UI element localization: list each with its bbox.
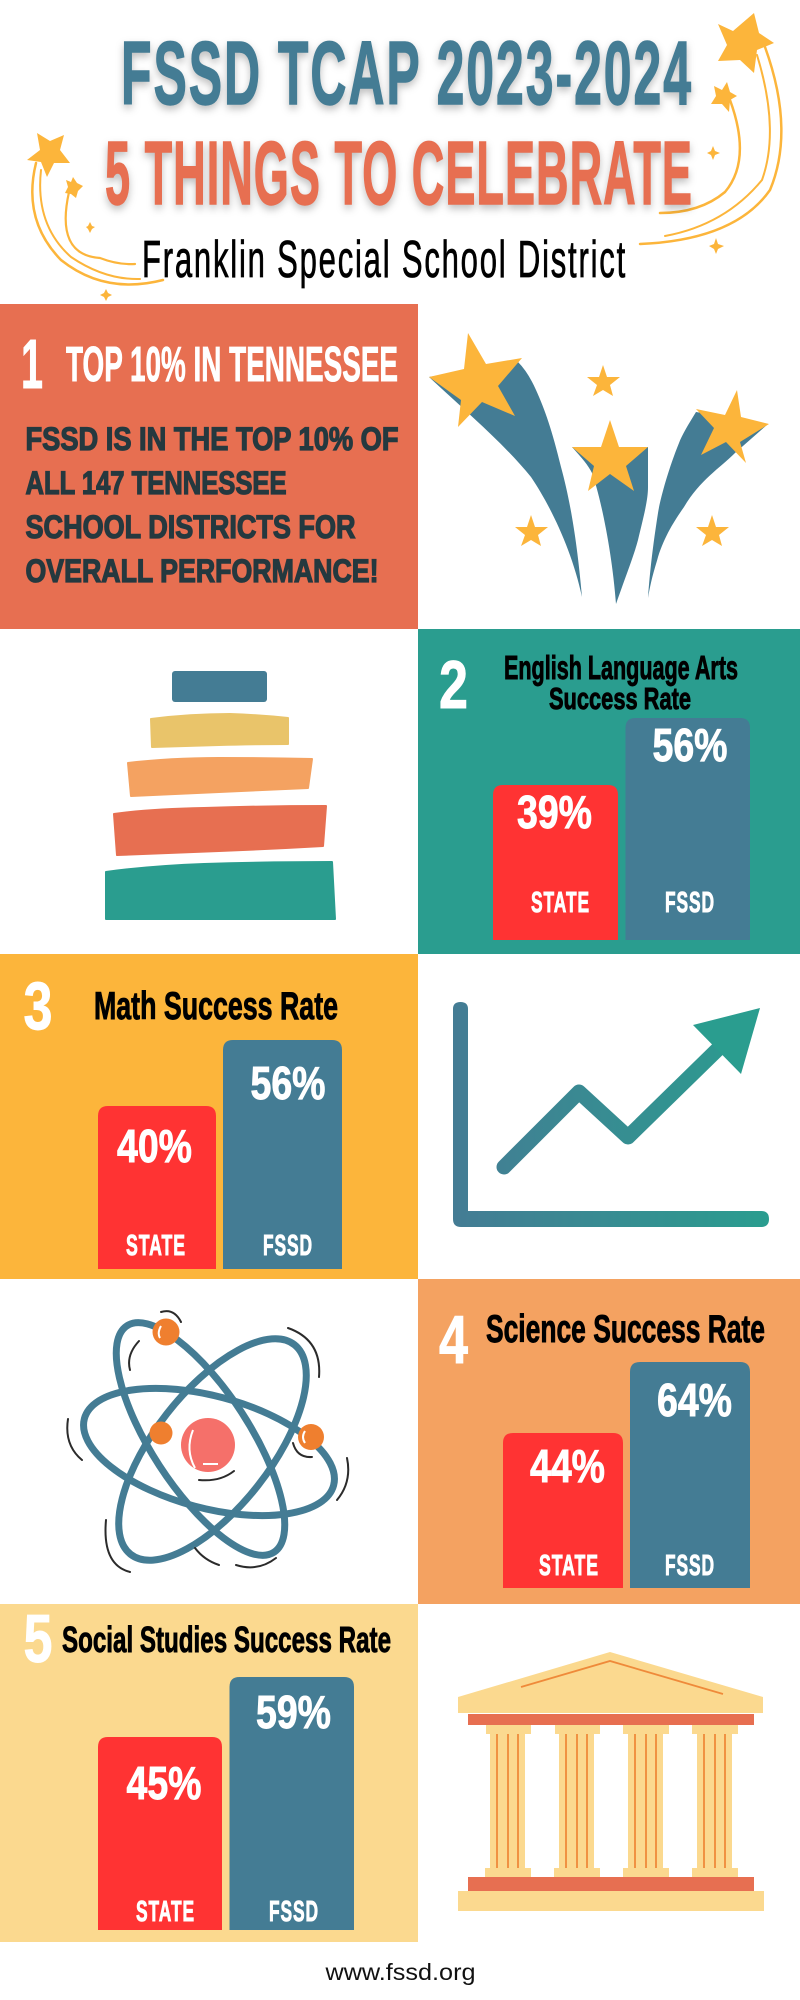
bar: FSSD: [626, 718, 750, 940]
icon: shooting stars right: [640, 13, 781, 254]
heading: Social Studies Success Rate: [62, 1619, 391, 1660]
number 1: 1: [21, 325, 43, 403]
bar: FSSD: FSSD: [665, 887, 715, 919]
heading: Success Rate: [549, 681, 691, 716]
bar: FSSD: [230, 1677, 354, 1930]
bar: state: [98, 1106, 216, 1269]
bar: state: [493, 785, 618, 940]
icon: fireworks: [429, 333, 769, 604]
bar: state: STATE: [126, 1230, 186, 1262]
heading: Math Success Rate: [94, 985, 338, 1028]
body text: FSSD IS IN THE TOP 10% OF: [26, 421, 398, 457]
panel 4: Science: [418, 1279, 800, 1604]
heading: [504, 649, 738, 716]
icon: atom: [67, 1299, 348, 1590]
body text: [26, 421, 398, 589]
bar: state: 39%: [517, 786, 592, 838]
icon: stacked pyramid: [106, 671, 335, 919]
footer url: www.fssd.org: [324, 1959, 476, 1985]
bar: state: [503, 1433, 623, 1588]
number 4: 4: [439, 1302, 468, 1378]
number 3: 3: [24, 968, 52, 1044]
bar: FSSD: FSSD: [665, 1550, 715, 1582]
bar: state: [98, 1737, 222, 1930]
panel 2: English Language Arts: [418, 629, 800, 954]
panel 1: top 10%: [0, 304, 418, 629]
body text: ALL 147 TENNESSEE: [26, 465, 286, 501]
icon: shooting stars left: [27, 133, 163, 301]
bar: state: STATE: [531, 887, 590, 919]
heading: TOP 10% IN TENNESSEE: [66, 338, 398, 392]
body text: SCHOOL DISTRICTS FOR: [26, 509, 356, 545]
number 5: 5: [24, 1601, 52, 1677]
bar: FSSD: [223, 1040, 342, 1269]
header: [27, 13, 781, 301]
bar: FSSD: FSSD: [263, 1230, 313, 1262]
bar: state: 45%: [126, 1757, 202, 1809]
bar: FSSD: 56%: [652, 719, 728, 771]
bar: state: STATE: [136, 1896, 195, 1928]
bar: state: 40%: [117, 1120, 192, 1172]
icon: rising line chart: [453, 1002, 769, 1227]
bar: state: STATE: [539, 1550, 599, 1582]
bar: FSSD: 59%: [256, 1686, 331, 1738]
panel 3: Math: [0, 954, 418, 1279]
bar: state: 44%: [530, 1440, 605, 1492]
bar: FSSD: 64%: [657, 1374, 732, 1426]
body text: OVERALL PERFORMANCE!: [26, 553, 378, 589]
icon: greek temple: [458, 1652, 764, 1911]
panel 5: Social Studies: [0, 1601, 418, 1942]
bar: FSSD: [630, 1362, 750, 1588]
bar: FSSD: FSSD: [269, 1896, 319, 1928]
number 2: 2: [439, 647, 468, 723]
bar: FSSD: 56%: [250, 1057, 326, 1109]
